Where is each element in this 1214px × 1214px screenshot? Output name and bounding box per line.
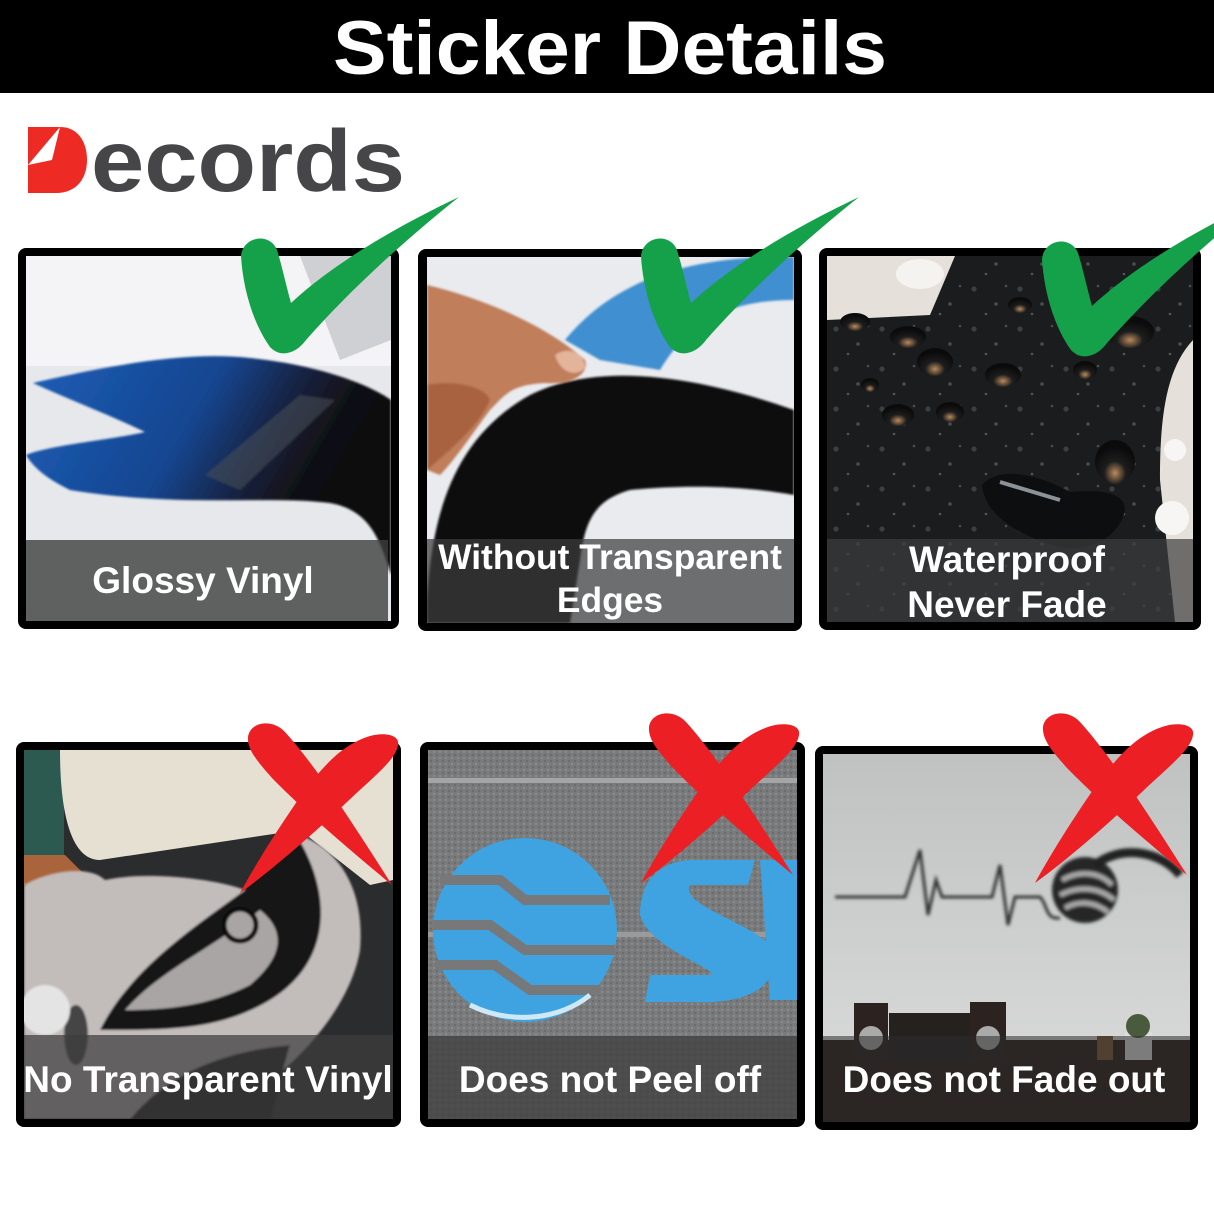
caption: Waterproof [909, 539, 1106, 580]
caption: No Transparent Vinyl [23, 1059, 393, 1100]
caption: Never Fade [907, 584, 1107, 625]
caption: Without Transparent [438, 537, 782, 577]
icon: red cross 1 [240, 723, 398, 893]
caption: Does not Peel off [459, 1059, 762, 1100]
caption: Edges [557, 580, 663, 620]
caption: Does not Fade out [843, 1059, 1165, 1100]
icon: red cross 2 [641, 713, 799, 883]
title: Sticker Details [333, 6, 887, 91]
caption [428, 1036, 797, 1119]
caption [26, 540, 388, 621]
icon: green check 1 [241, 197, 459, 353]
panel: Waterproof Never Fade [819, 248, 1201, 630]
panel: Without Transparent Edges [418, 249, 802, 631]
caption [827, 539, 1193, 625]
logo: Decords: ecords [91, 113, 405, 210]
caption [823, 1036, 1190, 1122]
panel: Glossy Vinyl [18, 248, 399, 629]
title banner [0, 0, 1214, 93]
caption: Glossy Vinyl [92, 560, 314, 601]
panel: Does not Peel off [420, 742, 805, 1127]
icon: green check 2 [641, 197, 859, 353]
panel: No Transparent Vinyl [16, 742, 401, 1127]
caption [23, 1035, 393, 1119]
caption [427, 537, 794, 623]
icon: green check 3 [1042, 200, 1214, 356]
panel: Does not Fade out [815, 746, 1198, 1130]
icon: red cross 3 [1035, 713, 1193, 883]
